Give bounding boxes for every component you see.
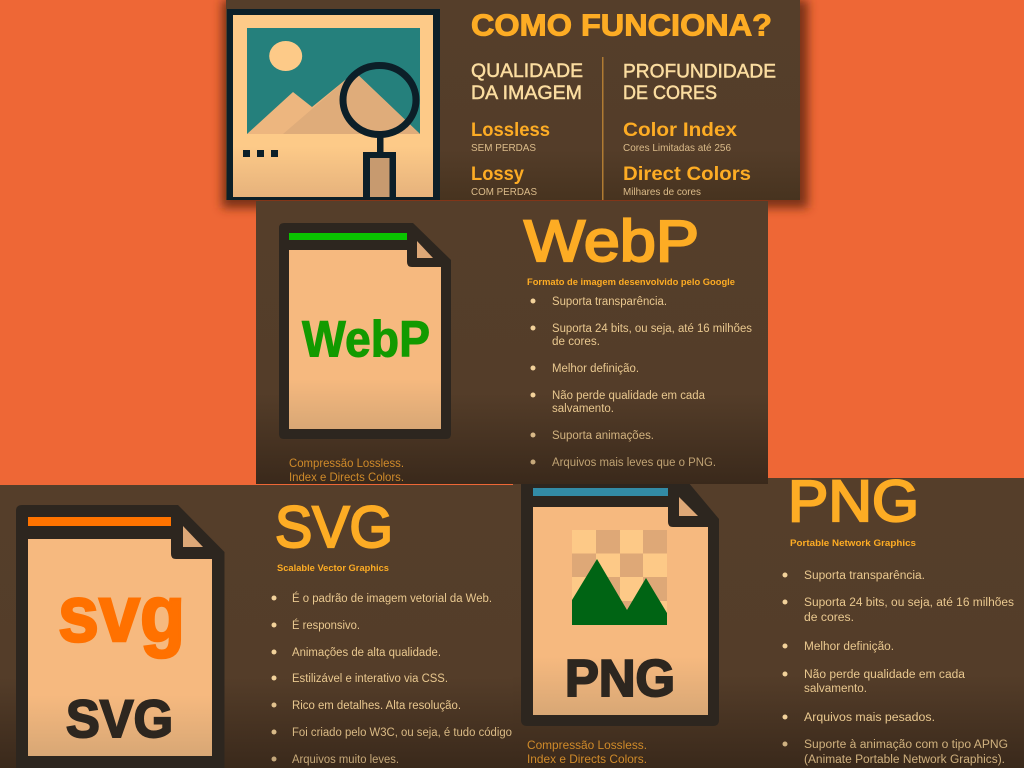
column: profundidade de cores: DE CORES <box>623 83 717 104</box>
list: PNG features: Suporta 24 bits, ou seja, até 16 milhões <box>804 597 1014 609</box>
list: SVG features: Estilizável e interativo via CSS. <box>292 673 448 685</box>
column: qualidade da imagem: COM PERDAS <box>471 186 537 198</box>
column: profundidade de cores: Direct Colors <box>623 163 751 185</box>
note: PNG compression: Index e Directs Colors. <box>527 752 647 766</box>
heading: WebP: WebP <box>524 209 699 274</box>
icon: SVG file: SVG <box>66 690 173 749</box>
note: PNG compression: Compressão Lossless. <box>527 738 647 752</box>
list: PNG features: Arquivos mais pesados. <box>804 712 935 724</box>
heading: PNG: PNG <box>788 469 919 534</box>
list: WebP features <box>530 296 752 469</box>
panel: como funciona <box>222 0 808 208</box>
list: WebP features: Suporta 24 bits, ou seja, até 16 milhões <box>552 323 752 335</box>
note: PNG compression <box>527 738 647 766</box>
heading: SVG: SVG <box>275 495 393 560</box>
icon: image with magnifying glass <box>227 9 440 200</box>
list: WebP features: Não perde qualidade em cada <box>552 390 706 402</box>
list: SVG features: Arquivos muito leves. <box>292 754 399 766</box>
list: WebP features: de cores. <box>552 336 600 348</box>
column: profundidade de cores: Milhares de cores <box>623 186 701 198</box>
list: PNG features: Suporta transparência. <box>804 570 925 582</box>
column: qualidade da imagem: SEM PERDAS <box>471 142 536 154</box>
column: profundidade de cores <box>623 62 776 198</box>
note: WebP compression: Index e Directs Colors. <box>289 470 404 484</box>
icon: PNG file: PNG <box>565 650 675 708</box>
column: qualidade da imagem: QUALIDADE <box>471 61 583 82</box>
icon: SVG file <box>16 505 224 768</box>
list: WebP features: Suporta transparência. <box>552 296 667 308</box>
subtitle: PNG: Portable Network Graphics <box>790 538 916 548</box>
list: SVG features <box>272 592 512 766</box>
list: WebP features: Suporta animações. <box>552 430 654 442</box>
column: qualidade da imagem: Lossless <box>471 119 550 141</box>
column: profundidade de cores: Color Index <box>623 119 737 141</box>
icon: WebP file <box>279 223 451 439</box>
list: PNG features <box>782 570 1014 766</box>
list: SVG features: Foi criado pelo W3C, ou seja, é tudo código <box>292 727 512 739</box>
subtitle: SVG: Scalable Vector Graphics <box>277 563 389 573</box>
icon: PNG file <box>521 476 719 726</box>
column: qualidade da imagem: Lossy <box>471 163 524 185</box>
column: qualidade da imagem <box>471 61 583 198</box>
icon: SVG file: svg <box>58 569 185 658</box>
list: PNG features: Suporte à animação com o tipo APNG <box>804 739 1008 751</box>
list: WebP features: salvamento. <box>552 403 614 415</box>
panel: WebP <box>256 201 768 484</box>
subtitle: WebP: Formato de imagem desenvolvido pelo Google <box>527 277 735 287</box>
list: PNG features: de cores. <box>804 612 854 624</box>
panel: SVG <box>0 485 513 768</box>
list: PNG features: Não perde qualidade em cada <box>804 669 966 681</box>
list: SVG features: Rico em detalhes. Alta resolução. <box>292 700 461 712</box>
column: profundidade de cores: Cores Limitadas até 256 <box>623 142 731 154</box>
note: WebP compression: Compressão Lossless. <box>289 456 404 470</box>
icon: WebP file: WebP <box>302 310 430 368</box>
list: PNG features: Melhor definição. <box>804 641 894 653</box>
checkerboard <box>572 530 667 625</box>
list: SVG features: É responsivo. <box>292 619 360 632</box>
note: WebP compression <box>289 456 404 484</box>
list: SVG features: Animações de alta qualidade. <box>292 647 441 659</box>
list: PNG features: (Animate Portable Network Graphics). <box>804 754 1005 766</box>
list: WebP features: Arquivos mais leves que o PNG. <box>552 457 716 469</box>
list: WebP features: Melhor definição. <box>552 363 639 375</box>
heading: como funciona: COMO FUNCIONA? <box>471 8 772 42</box>
list: SVG features: É o padrão de imagem vetorial da Web. <box>292 592 492 605</box>
column: profundidade de cores: PROFUNDIDADE <box>623 62 776 82</box>
list: PNG features: salvamento. <box>804 683 867 695</box>
column: qualidade da imagem: DA IMAGEM <box>471 83 582 104</box>
panel: PNG <box>513 469 1024 768</box>
